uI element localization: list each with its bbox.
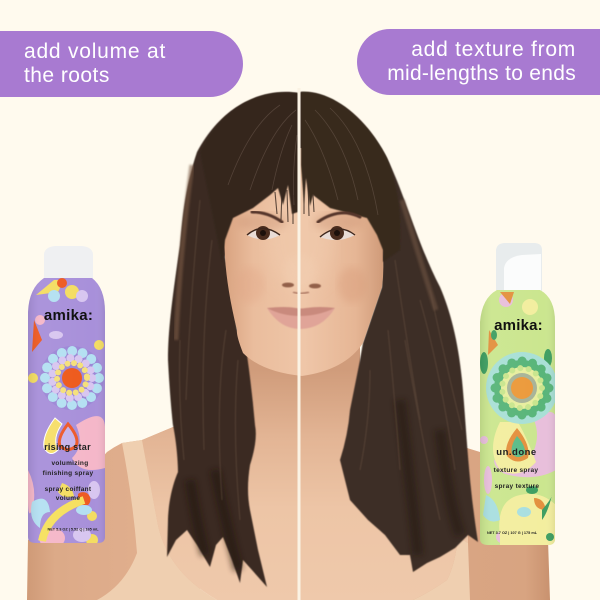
callout: add volume at the roots [0, 31, 243, 97]
callout: add texture from mid-lengths to ends: add texture from [411, 38, 576, 61]
arms and shoulders [27, 427, 550, 600]
product: un.done spray: texture spray [494, 467, 538, 474]
pattern [480, 293, 557, 544]
callout: add texture from mid-lengths to ends: mid-lengths to ends [387, 62, 576, 85]
hair: long lengths [167, 92, 478, 587]
flower [40, 346, 104, 410]
product: un.done spray [480, 243, 558, 546]
product: un.done spray: un.done [496, 447, 537, 458]
product: un.done spray: spray texture [495, 483, 539, 490]
drop [506, 428, 529, 462]
face [224, 148, 383, 376]
paisleys [44, 418, 62, 454]
pattern [28, 315, 105, 548]
product: rising star spray: spray coiffant [45, 486, 92, 493]
portrait and product illustration [27, 88, 555, 600]
product: rising star spray [28, 246, 106, 548]
product: rising star spray: volumizing [52, 460, 88, 467]
callout: add texture from mid-lengths to ends [357, 29, 600, 95]
product: un.done spray: NET 3.7 OZ | 107 G | 175 mL [487, 531, 538, 535]
bottle text: amika: [44, 307, 93, 324]
flower [486, 352, 558, 424]
tank top [97, 440, 470, 600]
bottle text: amika: [494, 317, 543, 334]
neck and chest [142, 340, 468, 600]
fringe [200, 92, 400, 262]
eyes [247, 226, 355, 240]
product: rising star spray: volume [56, 495, 80, 502]
lips [267, 307, 335, 329]
product: rising star spray: NET 5.3 OZ | 5.52 Q | 165 mL [47, 528, 99, 532]
callout: add volume at the roots: add volume at [24, 40, 166, 63]
callout: add volume at the roots: the roots [24, 64, 110, 87]
nose [282, 254, 321, 294]
centre divider [298, 88, 300, 600]
eyebrows [252, 212, 360, 222]
product: rising star spray: finishing spray [43, 470, 93, 477]
product: rising star spray: rising star [44, 442, 91, 452]
